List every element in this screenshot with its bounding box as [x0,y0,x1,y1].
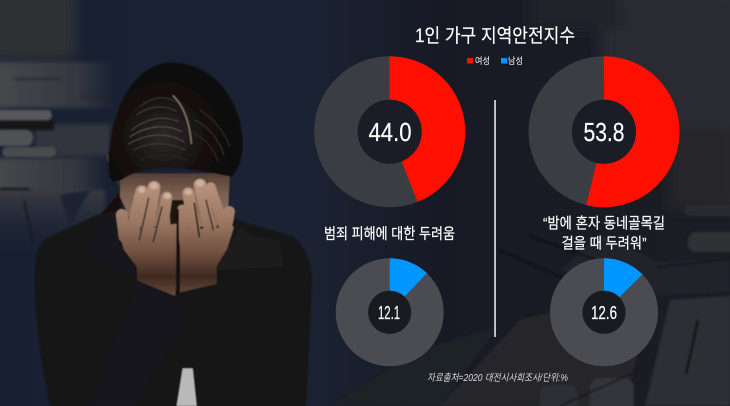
jacket [35,210,312,406]
caption: fear at night: 걸을 때 두려워” [562,235,646,252]
donut: women, fear of crime 44.0: 44.0 [368,117,412,147]
source note: 자료출처=2020 대전시사회조사/단위:% [427,372,568,384]
legend [467,55,523,66]
face [120,173,230,227]
jacket sleeves [88,278,278,406]
donut: men, fear of crime 12.1: 12.1 [378,303,400,323]
donut: women, fear at night 53.8: 53.8 [584,117,624,147]
donut: men, fear at night 12.6 [566,275,642,350]
center divider [494,100,496,337]
hair [108,63,243,182]
hands [119,180,234,296]
caption: fear at night: “밤에 혼자 동네골목길 [543,215,665,232]
legend: male: 남성 [508,56,523,66]
caption: fear at night [543,215,665,252]
donut: men, fear of crime 12.1 [352,275,427,350]
donut: men, fear at night 12.6: 12.6 [591,303,617,323]
legend: female: 여성 [475,55,490,66]
donut: women, fear at night 53.8 [550,78,658,185]
shirt [177,368,197,406]
photo: woman covering her face with her hands [35,63,312,406]
caption: fear of crime: 범죄 피해에 대한 두려움 [324,226,455,242]
ponytail wisp [99,190,122,216]
donut: women, fear of crime 44.0 [336,78,443,185]
jacket lapels [87,212,140,280]
title: 1인 가구 지역안전지수 [415,25,575,47]
